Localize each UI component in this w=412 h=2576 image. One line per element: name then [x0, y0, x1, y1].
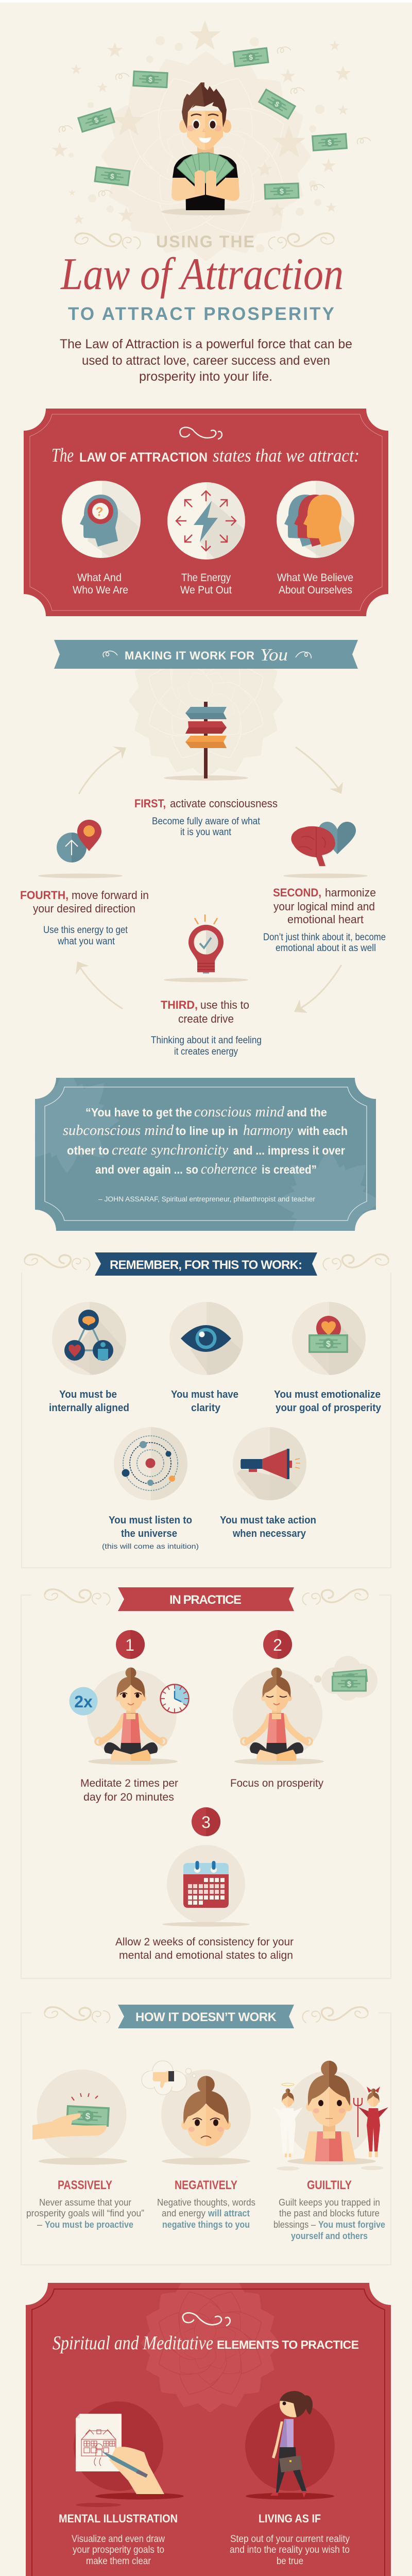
quote text: subconscious mind: [63, 1123, 174, 1139]
number badge 3: 3: [201, 1813, 211, 1832]
column: guiltily: Guilt keeps you trapped in: [279, 2197, 380, 2208]
ribbon: making it work for you: [54, 640, 358, 669]
panel: spiritual and meditative elements: [26, 2252, 391, 2576]
item: mental illustration: make them clear: [86, 2556, 151, 2567]
how ribbon: [118, 2005, 294, 2028]
icon labels: What We Believe: [277, 572, 353, 584]
panel: remember: [22, 1252, 391, 1568]
step one text: it is you want: [180, 827, 232, 838]
step four text: Use this energy to get: [43, 925, 128, 936]
icon: brain and heart: [283, 822, 368, 878]
hero illustration: [52, 19, 371, 294]
in practice ribbon: IN PRACTICE: [169, 1593, 242, 1607]
quote text: is created”: [262, 1163, 317, 1176]
step captions: Meditate 2 times per: [80, 1777, 178, 1789]
illustration: hand offering money: $: [85, 2111, 91, 2121]
calendar caption: mental and emotional states to align: [119, 1950, 293, 1961]
hero mandala backdrop: [68, 19, 344, 294]
step three text: create drive: [178, 1012, 234, 1025]
remember labels row two: [102, 1515, 316, 1550]
panel: the law states: [24, 409, 388, 616]
in practice flourishes: [44, 1589, 368, 1605]
step two text: your logical mind and: [273, 900, 375, 913]
step two text: [263, 886, 386, 954]
panel: in practice: [21, 1587, 391, 1978]
title block: [60, 232, 344, 324]
thought cloud with money: [308, 1656, 377, 1701]
flying dollar bills: $: [280, 187, 284, 195]
column: passively: You must be proactive: [45, 2219, 133, 2230]
mini devil: [354, 2087, 388, 2157]
quote attribution: – JOHN ASSARAF, Spiritual entrepreneur, philanthropist and teacher: [98, 1195, 315, 1203]
column: passively: –: [37, 2219, 42, 2230]
column: passively: Never assume that your: [39, 2197, 131, 2208]
intro paragraph: [60, 337, 352, 384]
panel heading: states that we attract:: [213, 445, 359, 466]
item: mental illustration: your prosperity goals to: [73, 2545, 164, 2555]
number badge 1: 1: [125, 1636, 134, 1654]
how flourishes: [44, 2007, 368, 2023]
icon: location pin: [38, 820, 123, 878]
illustration: negative thinker: [142, 2061, 251, 2165]
column: negatively: [157, 2178, 255, 2230]
flying dollar bills: [77, 47, 348, 200]
ribbon: making it work for you: MAKING IT WORK FOR: [125, 649, 254, 662]
item: living as if: and into the reality you wish to: [230, 2545, 350, 2555]
calendar caption: Allow 2 weeks of consistency for your: [115, 1936, 294, 1948]
icon labels: What And: [77, 572, 122, 584]
title flourishes: [75, 233, 334, 249]
how ribbon: HOW IT DOESN’T WORK: [135, 2010, 277, 2024]
step one text: Become fully aware of what: [152, 816, 261, 827]
icon labels: We Put Out: [180, 584, 232, 596]
title line: to attract prosperity: TO ATTRACT PROSPERITY: [68, 304, 334, 324]
cycle diagram: [20, 702, 386, 1057]
step four text: FOURTH,: [20, 889, 68, 902]
step two text: emotional heart: [287, 913, 364, 926]
icon labels: [73, 572, 353, 596]
step three text: Thinking about it and feeling: [151, 1035, 262, 1046]
step four text: what you want: [57, 936, 115, 947]
step one text: FIRST,: [134, 797, 166, 810]
remember labels row one: You must be: [59, 1389, 117, 1400]
quote text: coherence: [201, 1161, 257, 1177]
flying dollar bills: $: [148, 75, 153, 83]
column: passively: prosperity goals will “find you”: [26, 2208, 144, 2218]
item: living as if: LIVING AS IF: [259, 2512, 321, 2525]
panel heading: [52, 445, 359, 466]
ribbon: making it work for you: You: [260, 646, 288, 665]
step two text: harmonize: [325, 886, 376, 899]
column: guiltily: blessings –: [273, 2219, 316, 2230]
icon labels: The Energy: [181, 572, 231, 584]
number badge 2: 2: [273, 1636, 282, 1654]
woman meditating with 2x and clock: [69, 1667, 189, 1765]
hero stars: [52, 20, 351, 252]
icon: signpost: [164, 702, 248, 781]
step three text: it creates energy: [174, 1046, 238, 1057]
step captions: [80, 1777, 323, 1803]
mini angel: [273, 2083, 303, 2157]
remember labels row two: the universe: [121, 1528, 177, 1539]
panel flourish: [183, 2313, 230, 2326]
remember labels row one: clarity: [191, 1402, 221, 1414]
panel heading: [53, 2332, 359, 2354]
column: guiltily: yourself and others: [291, 2231, 368, 2241]
calendar caption: [115, 1936, 294, 1961]
number badge 1: [116, 1630, 145, 1659]
remember labels row one: your goal of prosperity: [276, 1402, 382, 1414]
hero squiggles: [59, 47, 371, 197]
remember labels row one: You must emotionalize: [274, 1389, 381, 1400]
panel heading: The: [52, 445, 74, 466]
column: guiltily: [273, 2178, 385, 2241]
quote text: [63, 1104, 348, 1177]
intro paragraph: prosperity into your life.: [139, 369, 272, 384]
icon: clock: [160, 1684, 189, 1713]
icon: head with question mark: [62, 481, 141, 558]
column: guiltily: You must forgive: [318, 2219, 385, 2230]
remember labels row two: You must take action: [220, 1515, 316, 1526]
flying dollar bills: $: [248, 53, 253, 61]
step captions: day for 20 minutes: [83, 1791, 174, 1803]
icon labels: About Ourselves: [279, 584, 352, 596]
step two text: emotional about it as well: [276, 943, 376, 954]
step four text: [20, 889, 149, 947]
illustration: drawing a house: [74, 2401, 184, 2507]
icon: light bulb with check: [164, 914, 248, 982]
item: living as if: [230, 2512, 350, 2567]
quote text: and over again ... so: [95, 1163, 198, 1176]
icon: heart and money: [292, 1302, 366, 1375]
remember labels row two: when necessary: [232, 1528, 306, 1539]
quote text: to line up in: [176, 1124, 238, 1138]
quote text: and ... impress it over: [233, 1144, 345, 1157]
panel: how it doesn't work: [21, 2005, 391, 2265]
making it work backdrop mandala: [129, 669, 283, 775]
icon labels: Who We Are: [73, 584, 128, 596]
icon: heart and money: $: [326, 1340, 331, 1349]
remember ribbon: [95, 1252, 317, 1276]
icon: head with question mark: ?: [96, 505, 103, 519]
step two text: Don’t just think about it, become: [263, 932, 386, 943]
badge: 2x: [69, 1687, 98, 1716]
illustration: hand offering money: [32, 2070, 127, 2165]
remember flourishes: [24, 1255, 389, 1270]
column: guiltily: GUILTILY: [307, 2178, 352, 2192]
item: mental illustration: [59, 2512, 178, 2567]
step captions: Focus on prosperity: [230, 1777, 323, 1789]
remember labels row one: internally aligned: [49, 1402, 129, 1414]
step three text: use this to: [200, 998, 249, 1011]
title line: law of attraction: Law of Attraction: [60, 249, 344, 299]
quote text: create synchronicity: [112, 1142, 229, 1158]
icon: three head silhouettes: [277, 481, 354, 558]
quote text: conscious mind: [194, 1104, 285, 1120]
quote text: and the: [287, 1106, 327, 1119]
step three text: [151, 998, 262, 1057]
panel heading: Spiritual and Meditative: [53, 2332, 213, 2354]
item: mental illustration: Visualize and even draw: [72, 2534, 165, 2545]
column: negatively: negative things to you: [162, 2219, 250, 2230]
remember ribbon: REMEMBER, FOR THIS TO WORK:: [110, 1258, 302, 1272]
remember labels row one: You must have: [171, 1389, 238, 1400]
icon: megaphone: [233, 1427, 306, 1504]
cycle arrows: [76, 747, 343, 1013]
quote text: other to: [67, 1144, 109, 1157]
man holding money: [161, 82, 251, 215]
quote text: harmony: [243, 1123, 294, 1139]
flying dollar bills: $: [328, 138, 332, 146]
step one text: activate consciousness: [170, 797, 278, 810]
remember labels row two: (this will come as intuition): [102, 1542, 199, 1550]
illustration: guilty woman, angel and devil: [273, 2061, 388, 2171]
item: living as if: Step out of your current reality: [230, 2534, 350, 2545]
panel heading: LAW OF ATTRACTION: [79, 450, 208, 465]
flying dollar bills: $: [273, 99, 281, 109]
in practice ribbon: [118, 1587, 294, 1611]
icon: energy bolt with arrows: [167, 482, 245, 560]
column: guiltily: the past and blocks future: [279, 2208, 380, 2218]
illustration: woman walking with briefcase: [245, 2391, 335, 2500]
panel flourish: [180, 427, 222, 439]
column: negatively: Negative thoughts, words: [157, 2197, 255, 2208]
number badge 3: [192, 1807, 220, 1836]
column: passively: PASSIVELY: [58, 2178, 112, 2192]
column: negatively: and energy: [162, 2208, 205, 2218]
step four text: move forward in: [72, 889, 149, 902]
remember labels row one: [49, 1389, 382, 1414]
thought cloud with money: $: [347, 1680, 351, 1688]
quote text: with each: [297, 1124, 348, 1138]
quote text: “You have to get the: [85, 1106, 192, 1119]
panel: quote: [35, 1078, 376, 1231]
intro paragraph: used to attract love, career success and even: [82, 353, 330, 368]
step four text: your desired direction: [33, 902, 135, 915]
column: passively: [26, 2178, 144, 2230]
step two text: SECOND,: [273, 886, 321, 899]
woman meditating on prosperity: [233, 1656, 377, 1765]
panel heading: ELEMENTS TO PRACTICE: [217, 2338, 359, 2351]
title line: using the: USING THE: [156, 232, 254, 251]
icon: eye: [169, 1302, 243, 1375]
step three text: THIRD,: [161, 998, 198, 1011]
remember labels row two: You must listen to: [109, 1515, 192, 1526]
icon: universe orbits: [114, 1427, 187, 1500]
thought bubble: thumbs down: [142, 2061, 196, 2095]
badge: 2x: 2x: [74, 1692, 93, 1711]
intro paragraph: The Law of Attraction is a powerful force that can be: [60, 337, 352, 351]
step one text: [134, 797, 278, 838]
column: negatively: NEGATIVELY: [175, 2178, 237, 2192]
item: living as if: be true: [277, 2556, 303, 2567]
column: negatively: will attract: [208, 2208, 250, 2218]
flying dollar bills: $: [110, 172, 115, 180]
number badge 2: [263, 1630, 292, 1659]
icon: calendar: [162, 1845, 250, 1927]
flying dollar bills: $: [93, 115, 99, 125]
item: mental illustration: MENTAL ILLUSTRATION: [59, 2512, 178, 2525]
icon: aligned triangle: [52, 1302, 126, 1375]
